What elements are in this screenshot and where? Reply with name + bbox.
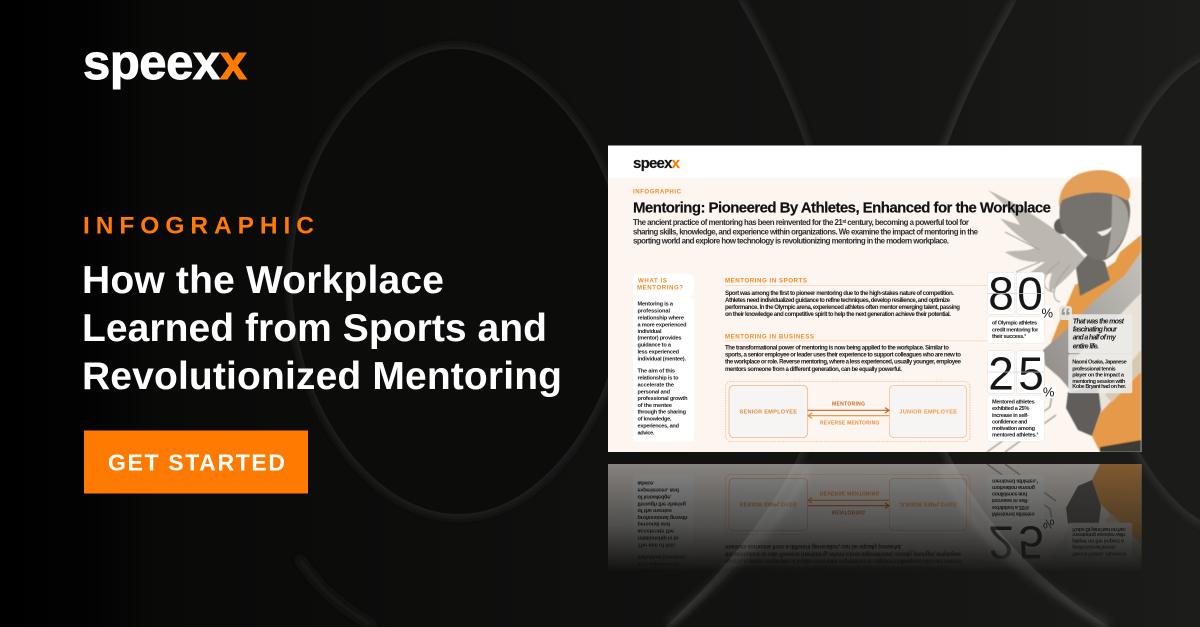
stat: 25 percent: 5 [1018, 347, 1044, 399]
stat: 25 percent: exhibited a 25% [992, 406, 1029, 412]
arrow: reverse mentoring: REVERSE MENTORING [820, 421, 879, 427]
card reflection: accelerate the [638, 528, 674, 534]
panel: what is mentoring: individual (mentee). [638, 357, 686, 363]
box: junior employee [889, 385, 967, 438]
panel: what is mentoring: advice. [638, 431, 655, 437]
icon: quotation mark: “ [1060, 304, 1071, 329]
card reflection: mentors someone from a different generation, can be equally powerful. [725, 543, 902, 550]
quote: Naomi Osaka: Kobe Bryant had on her. [1072, 384, 1126, 390]
card reflection: player on the impact a [1072, 538, 1125, 544]
panel: what is mentoring: accelerate the [638, 382, 674, 388]
button: get started [84, 430, 308, 494]
card eyebrow: INFOGRAPHIC [633, 189, 682, 196]
stat: 25 percent: % [1043, 385, 1055, 400]
stat: 25 percent: increase in self- [992, 413, 1029, 419]
card reflection: Naomi Osaka, Japanese [1072, 551, 1127, 557]
panel: what is mentoring: of the mentee [638, 403, 672, 409]
section: mentoring in business: MENTORING IN BUSINESS [725, 334, 814, 341]
card reflection: mentored athletes.³ [992, 477, 1038, 484]
panel: what is mentoring: experiences, and [638, 424, 680, 430]
logo: speexx: speexx [83, 36, 247, 90]
card reflection: relationship is to [638, 534, 679, 540]
small logo: speexx [633, 155, 681, 172]
card reflection: REVERSE MENTORING [820, 489, 879, 495]
card reflection: individual (mentee). [638, 553, 686, 559]
panel: what is mentoring: of knowledge, [638, 417, 672, 423]
infographic preview card [608, 145, 1142, 452]
card reflection: confidence and [992, 491, 1028, 497]
stat: 80 percent [987, 267, 1054, 343]
card reflection: experiences, and [638, 486, 680, 492]
box: senior employee [729, 385, 808, 438]
headline: How the Workplace [82, 259, 444, 302]
section: mentoring in sports: MENTORING IN SPORTS [725, 278, 807, 285]
panel: what is mentoring: WHAT IS [638, 278, 667, 285]
arrow: reverse mentoring [808, 413, 889, 427]
card reflection: Mentored athletes [992, 511, 1035, 517]
stat: 80 percent: % [1042, 306, 1054, 321]
quote: Naomi Osaka: That was the most [1073, 319, 1125, 326]
panel: what is mentoring: relationship where [638, 316, 684, 322]
athlete photo [987, 170, 1141, 452]
stat: 25 percent: 2 [988, 347, 1014, 399]
arrow: mentoring: MENTORING [832, 402, 865, 408]
stat: 25 percent: confidence and [992, 419, 1028, 425]
diagram: mentoring flow [726, 382, 970, 442]
card reflection: less experienced [638, 560, 680, 566]
card intro [633, 218, 979, 245]
stat: 80 percent: 8 [988, 267, 1014, 319]
card reflection: advice. [638, 479, 655, 485]
card reflection: MENTORING [832, 508, 865, 514]
panel: what is mentoring: personal and [638, 389, 671, 395]
quote: Naomi Osaka: Naomi Osaka, Japanese [1072, 359, 1127, 365]
button: get started: GET STARTED [108, 450, 285, 476]
card reflection: SENIOR EMPLOYEE [740, 500, 797, 506]
stat: 25 percent: motivation among [992, 426, 1036, 432]
section: mentoring in sports [725, 278, 987, 318]
panel: what is mentoring [633, 274, 694, 442]
quote: Naomi Osaka [1059, 304, 1132, 393]
card title: Mentoring: Pioneered By Athletes, Enhanced for the Workplace [633, 200, 1051, 217]
section: mentoring in sports: Sport was among the first to pioneer mentoring due to the high-stakes nature of competition. [725, 290, 954, 297]
arrow: mentoring [808, 402, 889, 413]
quote: Naomi Osaka: fascinating hour [1073, 326, 1118, 333]
box: senior employee: SENIOR EMPLOYEE [740, 410, 797, 416]
headline [82, 259, 562, 398]
section: mentoring in business: mentors someone from a different generation, can be equally powerful. [725, 366, 902, 373]
card reflection: The aim of this [638, 541, 675, 547]
panel: what is mentoring: (mentor) provides [638, 336, 682, 342]
card reflection: through the sharing [638, 500, 687, 506]
stat: 80 percent: their success.³ [992, 333, 1026, 340]
section: mentoring in sports: on their knowledge and competitive spirit to help the next generation achieve their potential. [725, 311, 951, 318]
headline: Revolutionized Mentoring [82, 355, 562, 398]
card intro: The ancient practice of mentoring has been reinvented for the 21 [633, 218, 843, 227]
stat: 80 percent: 0 [1017, 267, 1043, 319]
panel: what is mentoring: relationship is to [638, 376, 679, 382]
card reflection: of knowledge, [638, 493, 672, 499]
card reflection: increase in self- [992, 497, 1029, 503]
card intro: st [842, 219, 847, 225]
panel: what is mentoring: The aim of this [638, 369, 675, 375]
card reflection: sports, a senior employee or leader uses their experience to support colleagues who are new to [725, 557, 961, 564]
card reflection: Kobe Bryant had on her. [1072, 526, 1126, 532]
card reflection: guidance to a [638, 567, 672, 573]
stat: 80 percent: of Olympic athletes [992, 320, 1037, 326]
stat: 25 percent: mentored athletes.³ [992, 432, 1038, 439]
panel: what is mentoring: professional [638, 309, 670, 315]
card reflection: The transformational power of mentoring is now being applied to the workplace. Similar to [725, 564, 949, 571]
panel: what is mentoring: MENTORING? [637, 285, 683, 292]
card reflection: professional growth [638, 514, 688, 520]
panel: what is mentoring: individual [638, 329, 662, 335]
quote: Naomi Osaka: player on the impact a [1072, 372, 1125, 378]
quote: Naomi Osaka: and a half of my [1073, 335, 1117, 342]
card reflection: personal and [638, 521, 671, 527]
section: mentoring in sports: performance. In the Olympic arena, experienced athletes often mentor emerging talent, passing [725, 304, 960, 311]
headline: Learned from Sports and [82, 307, 547, 350]
eyebrow: infographic: INFOGRAPHIC [83, 212, 314, 240]
stat: 25 percent: Mentored athletes [992, 399, 1035, 405]
box: junior employee: JUNIOR EMPLOYEE [899, 410, 957, 416]
panel: what is mentoring: through the sharing [638, 410, 687, 416]
section: mentoring in business: The transformational power of mentoring is now being applied to the workplace. Similar to [725, 345, 949, 352]
panel: what is mentoring: a more experienced [638, 323, 687, 329]
quote: Naomi Osaka: professional tennis [1072, 366, 1116, 372]
card intro: century, becoming a powerful tool for [846, 218, 969, 227]
section: mentoring in business [725, 334, 987, 373]
section: mentoring in business: the workplace or role. Reverse mentoring, where a less experienced, usually younger, employee [725, 359, 962, 366]
panel: what is mentoring: professional growth [638, 396, 688, 402]
section: mentoring in sports: Athletes need individualized guidance to refine techniques, develop resilience, and optimize [725, 297, 951, 304]
section: mentoring in business: sports, a senior employee or leader uses their experience to support colleagues who are new to [725, 352, 961, 359]
panel: what is mentoring: less experienced [638, 350, 680, 356]
card reflection: 2 [988, 517, 1014, 569]
card reflection: % [1043, 516, 1055, 531]
quote: Naomi Osaka: entire life. [1073, 343, 1099, 350]
card reflection [608, 464, 1142, 566]
card intro: sharing skills, knowledge, and experience within organizations. We examine the impact of mentoring in the [633, 227, 979, 236]
card reflection: JUNIOR EMPLOYEE [899, 500, 957, 506]
card reflection: the workplace or role. Reverse mentoring, where a less experienced, usually younger, employee [725, 550, 962, 557]
card reflection: mentoring session with [1072, 531, 1126, 537]
card reflection: exhibited a 25% [992, 504, 1029, 510]
quote: Naomi Osaka: mentoring session with [1072, 379, 1126, 385]
panel: what is mentoring: guidance to a [638, 343, 672, 349]
card reflection: 5 [1018, 517, 1044, 569]
card intro: sporting world and explore how technology is revolutionizing mentoring in the modern workplace. [633, 236, 949, 245]
reflection light curves [668, 466, 1108, 624]
card reflection: professional tennis [1072, 544, 1116, 550]
stat: 25 percent [987, 347, 1055, 441]
card reflection: motivation among [992, 484, 1036, 490]
card reflection: of the mentee [638, 507, 672, 513]
panel: what is mentoring: Mentoring is a [638, 302, 674, 308]
stat: 80 percent: credit mentoring for [992, 327, 1039, 333]
